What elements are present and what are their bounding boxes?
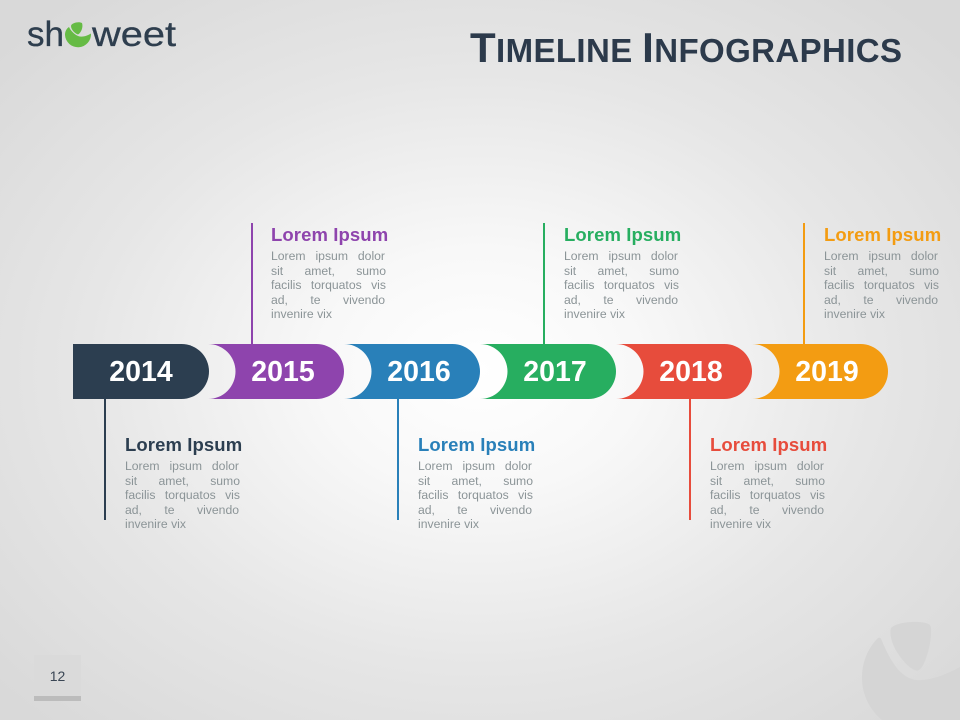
- segment 2019: 2019: [795, 356, 859, 388]
- segment 2014: 2014: [109, 356, 173, 388]
- text block 2017: invenire vix: [564, 307, 625, 321]
- page number: 12: [50, 668, 65, 684]
- text block 2014: Lorem ipsum dolor: [125, 459, 239, 473]
- text block 2017: Lorem ipsum dolor: [564, 249, 678, 263]
- text block 2016: Lorem ipsum dolor: [418, 459, 532, 473]
- segment 2015: 2015: [251, 356, 315, 388]
- text block 2018: [710, 434, 827, 531]
- title: TIMELINE INFOGRAPHICS: [470, 24, 902, 71]
- text block 2014: invenire vix: [125, 517, 186, 531]
- logo: showeet: weet: [91, 15, 176, 54]
- text block 2019: [824, 224, 941, 321]
- text block 2018: ad, te vivendo: [710, 502, 824, 516]
- text block 2016: invenire vix: [418, 517, 479, 531]
- text block 2019: facilis torquatos vis: [824, 278, 939, 292]
- text block 2018: invenire vix: [710, 517, 771, 531]
- text block 2019: invenire vix: [824, 307, 885, 321]
- text block 2016: facilis torquatos vis: [418, 488, 533, 502]
- connector 2016: [397, 399, 399, 520]
- text block 2015: Lorem Ipsum: [271, 224, 388, 245]
- segment 2019: [752, 344, 888, 399]
- connector 2015: [251, 223, 253, 344]
- text block 2017: [564, 224, 681, 321]
- text block 2014: facilis torquatos vis: [125, 488, 240, 502]
- text block 2018: facilis torquatos vis: [710, 488, 825, 502]
- text block 2017: Lorem Ipsum: [564, 224, 681, 245]
- text block 2019: Lorem ipsum dolor: [824, 249, 938, 263]
- segment 2016: 2016: [387, 356, 451, 388]
- text block 2017: sit amet, sumo: [564, 264, 679, 278]
- segment 2014: [73, 344, 209, 399]
- segment 2018: 2018: [659, 356, 723, 388]
- text block 2018: Lorem Ipsum: [710, 434, 827, 455]
- text block 2014: sit amet, sumo: [125, 474, 240, 488]
- watermark logo: [862, 622, 929, 680]
- segment 2017: [480, 344, 616, 399]
- text block 2015: sit amet, sumo: [271, 264, 386, 278]
- logo: showeet: [27, 15, 176, 54]
- segment 2018: [616, 344, 752, 399]
- text block 2016: ad, te vivendo: [418, 502, 532, 516]
- text block 2015: Lorem ipsum dolor: [271, 249, 385, 263]
- connector 2017: [543, 223, 545, 344]
- text block 2015: ad, te vivendo: [271, 292, 385, 306]
- connector 2019: [803, 223, 805, 344]
- connector 2014: [104, 399, 106, 520]
- segment 2016: [344, 344, 480, 399]
- segment 2015: [208, 344, 344, 399]
- text block 2018: sit amet, sumo: [710, 474, 825, 488]
- text block 2014: [125, 434, 242, 531]
- logo: showeet: sh: [27, 15, 64, 54]
- text block 2017: facilis torquatos vis: [564, 278, 679, 292]
- segment 2017: 2017: [523, 356, 587, 388]
- text block 2016: [418, 434, 535, 531]
- page number: [34, 655, 81, 701]
- text block 2019: sit amet, sumo: [824, 264, 939, 278]
- text block 2014: ad, te vivendo: [125, 502, 239, 516]
- text block 2016: sit amet, sumo: [418, 474, 533, 488]
- text block 2015: invenire vix: [271, 307, 332, 321]
- text block 2019: ad, te vivendo: [824, 292, 938, 306]
- connector 2018: [689, 399, 691, 520]
- text block 2015: facilis torquatos vis: [271, 278, 386, 292]
- text block 2017: ad, te vivendo: [564, 292, 678, 306]
- text block 2019: Lorem Ipsum: [824, 224, 941, 245]
- text block 2018: Lorem ipsum dolor: [710, 459, 824, 473]
- text block 2016: Lorem Ipsum: [418, 434, 535, 455]
- text block 2015: [271, 224, 388, 321]
- text block 2014: Lorem Ipsum: [125, 434, 242, 455]
